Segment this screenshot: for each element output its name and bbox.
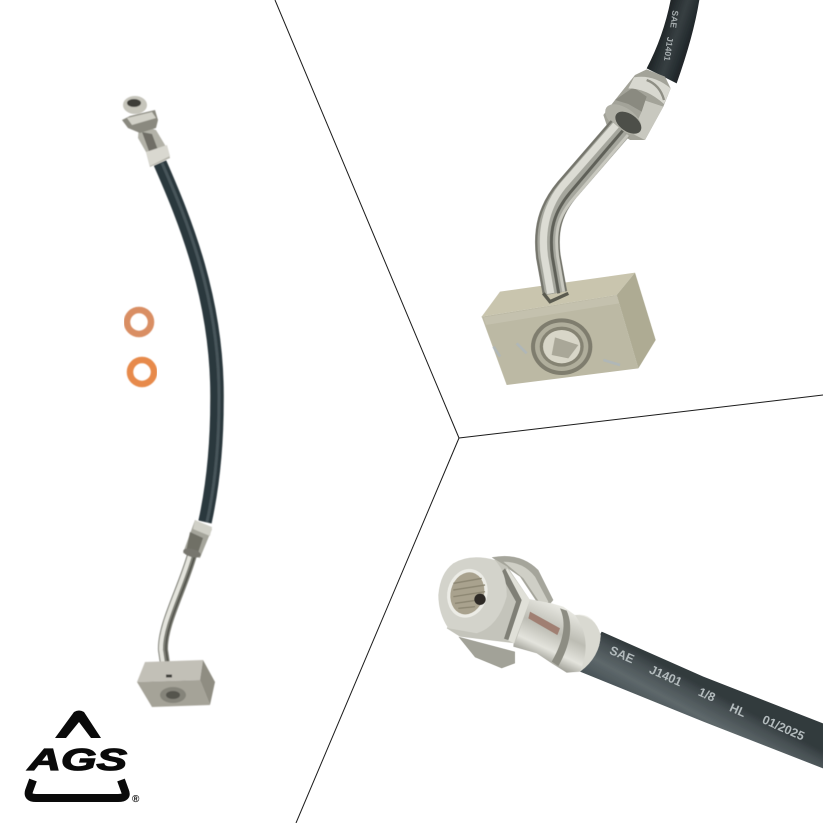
hose segment with markings	[647, 0, 699, 83]
threaded bore	[442, 564, 493, 622]
lower hose ferrule	[182, 520, 212, 559]
logo: registered mark: ®	[132, 794, 140, 805]
lower mounting block	[137, 660, 215, 707]
logo: lower bracket	[29, 780, 126, 798]
panel: close-up of mounting block and tube	[482, 0, 699, 385]
AGS logo	[27, 710, 140, 805]
hose segment with markings: SAE	[668, 10, 681, 29]
mounting block top face	[482, 273, 635, 317]
washer: lower	[130, 360, 154, 384]
hose segment: 1/8	[696, 685, 718, 705]
divider lines	[275, 0, 823, 823]
hose segment	[580, 632, 823, 768]
logo: upper chevron	[55, 710, 101, 738]
hose marking text: SAE	[607, 643, 636, 666]
lower tube	[161, 555, 195, 677]
hose segment: J1401	[647, 663, 684, 689]
mounting block	[482, 273, 656, 385]
hose ferrule	[600, 69, 671, 140]
logo: wordmark: AGS	[27, 742, 127, 777]
washer: upper	[127, 310, 151, 334]
threaded port	[531, 318, 592, 375]
copper washers	[127, 310, 154, 384]
metal fitting	[438, 556, 601, 673]
panel: full brake hose assembly	[122, 96, 219, 707]
hose segment: 01/2025	[760, 713, 807, 743]
top banjo fitting	[122, 96, 170, 167]
bent steel tube	[543, 125, 628, 302]
hose segment: HL	[727, 701, 749, 720]
hose body	[160, 163, 219, 522]
panel: close-up of banjo fitting and hose	[438, 556, 823, 768]
hose segment with markings: J1401	[662, 36, 675, 62]
